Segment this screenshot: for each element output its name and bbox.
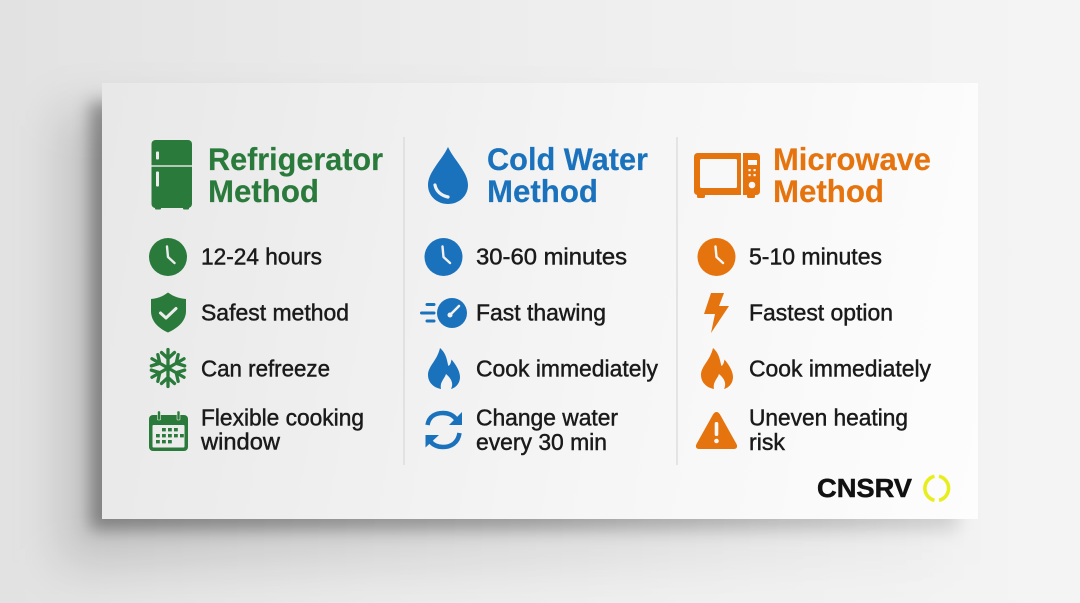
heading: cold water method (487, 141, 648, 209)
heading: cold water method: Cold Water (487, 141, 648, 177)
item: cook immediately (701, 348, 931, 389)
icon: refrigerator (152, 140, 192, 210)
heading: cold water method: Method (487, 173, 598, 209)
item: change water every 30 min: Change water (476, 404, 618, 430)
item: change water every 30 min (426, 404, 618, 455)
panel: refrigerator method (149, 140, 383, 454)
item: cook immediately (428, 348, 658, 389)
item: 30-60 minutes: 30-60 minutes (476, 244, 627, 270)
item: uneven heating risk: Uneven heating (749, 404, 908, 430)
panel: cold water method (422, 141, 658, 455)
item: safest method (151, 292, 349, 332)
panel: microwave method (694, 141, 931, 455)
heading: microwave method: Microwave (773, 141, 931, 177)
item: cook immediately: Cook immediately (749, 356, 931, 382)
icon: microwave (694, 153, 760, 198)
item: flexible cooking window: Flexible cooking (201, 404, 364, 430)
item: 12-24 hours: 12-24 hours (201, 244, 322, 270)
item: 5-10 minutes: 5-10 minutes (749, 244, 882, 270)
item: fastest option: Fastest option (749, 300, 893, 326)
heading: refrigerator method: Method (208, 173, 319, 209)
item: can refreeze: Can refreeze (201, 356, 330, 382)
item: 5-10 minutes (698, 238, 882, 276)
item: fast thawing (422, 298, 606, 328)
heading: microwave method (773, 141, 931, 209)
item: cook immediately: Cook immediately (476, 356, 658, 382)
item: can refreeze (149, 350, 330, 386)
logo: CNSRV (817, 473, 949, 503)
item: 30-60 minutes (424, 238, 627, 276)
panel: white card (102, 83, 978, 519)
item: flexible cooking window: window (200, 428, 280, 454)
item: change water every 30 min: every 30 min (476, 429, 607, 455)
item: uneven heating risk: risk (749, 429, 785, 455)
heading: refrigerator method (208, 141, 383, 209)
item: uneven heating risk (696, 404, 908, 455)
item: fastest option (704, 293, 893, 333)
item: fast thawing: Fast thawing (476, 300, 606, 326)
heading: refrigerator method: Refrigerator (208, 141, 383, 177)
item: flexible cooking window (149, 404, 364, 454)
logo: CNSRV: CNSRV (817, 473, 913, 503)
icon: water drop (428, 147, 468, 204)
item: safest method: Safest method (201, 300, 349, 326)
heading: microwave method: Method (773, 173, 884, 209)
item: 12-24 hours (149, 238, 322, 276)
